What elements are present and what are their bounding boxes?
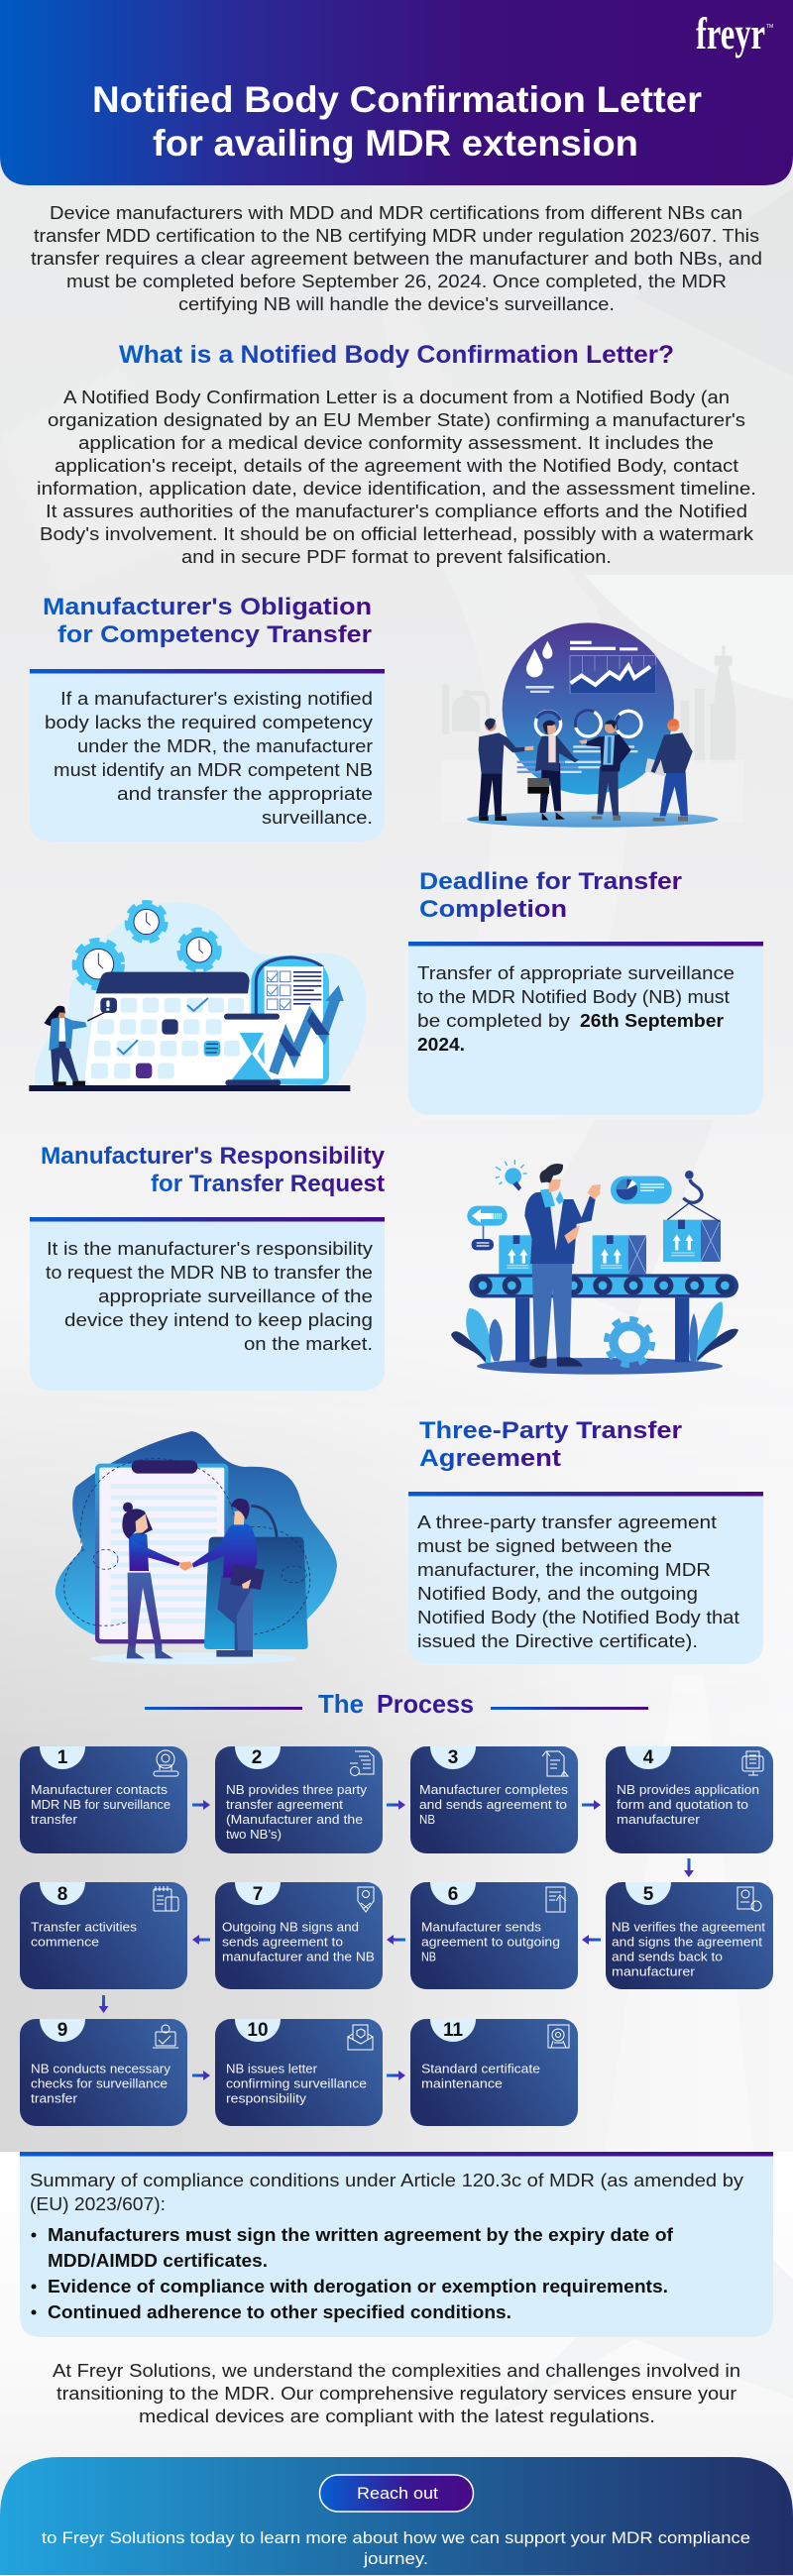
step 10	[215, 2019, 383, 2126]
heading: manufacturer's responsibility: for Transfer Request	[151, 1171, 385, 1197]
step 8: Transfer activities	[31, 1919, 138, 1935]
button: reach out: Reach out	[357, 2484, 438, 2503]
step 5	[606, 1882, 773, 1989]
step 8: commence	[31, 1935, 99, 1949]
footer text: journey.	[363, 2549, 428, 2568]
step 11: maintenance	[421, 2075, 503, 2091]
step 8: 8	[57, 1884, 67, 1905]
arrow: down	[684, 1858, 694, 1877]
step 4: 4	[643, 1747, 654, 1768]
arrow: left	[192, 1935, 210, 1945]
step 7: 7	[253, 1884, 263, 1905]
step 2: (Manufacturer and the	[226, 1812, 363, 1827]
definition paragraph: A Notified Body Confirmation Letter is a document from a Notified Body (an	[63, 388, 730, 407]
icon: gear	[607, 1319, 652, 1365]
panel: deadline: 2024.	[417, 1035, 465, 1055]
person: man with tablet	[645, 719, 693, 822]
step 2: two NB’s)	[226, 1827, 282, 1842]
definition paragraph: application for a medical device conformity assessment. It includes the	[78, 433, 714, 453]
heading: what is a notified body confirmation letter: What is a Notified Body Confirmation Letter?	[119, 341, 674, 369]
icon: bag	[204, 1506, 308, 1649]
heading: manufacturer's responsibility	[41, 1143, 385, 1197]
logo: freyr: freyr	[696, 8, 765, 58]
panel: three-party agreement	[408, 1492, 763, 1664]
heading: the process: The	[318, 1689, 364, 1719]
heading: deadline for transfer completion: Completion	[419, 896, 567, 923]
panel: competency transfer: must identify an MDR competent NB	[54, 760, 373, 780]
conveyor belt	[469, 1274, 738, 1297]
step 3: Manufacturer completes	[419, 1782, 569, 1797]
heading: deadline for transfer completion: Deadline for Transfer	[419, 868, 682, 895]
panel: responsibility: to request the MDR NB to transfer the	[46, 1263, 373, 1283]
step 7: sends agreement to	[222, 1935, 343, 1949]
heading: manufacturer's obligation: Manufacturer's Obligation	[43, 594, 372, 620]
arrow: left	[582, 1935, 601, 1945]
step 2: transfer agreement	[226, 1797, 343, 1812]
closing paragraph: transitioning to the MDR. Our comprehensive regulatory services ensure your	[57, 2384, 736, 2404]
icon: light bulb	[496, 1160, 527, 1191]
heading: three-party transfer agreement: Three-Party Transfer	[419, 1417, 683, 1444]
plants	[451, 1301, 738, 1363]
step 10: 10	[247, 2020, 269, 2041]
icon: device with checklist	[251, 955, 329, 1085]
heading: the process: Process	[377, 1689, 474, 1719]
panel: deadline: Transfer of appropriate surveillance	[417, 963, 735, 983]
step 11: 11	[443, 2020, 463, 2041]
step 4	[606, 1746, 773, 1853]
arrow	[192, 2071, 210, 2080]
bullet list: Evidence of compliance with derogation or exemption requirements.	[48, 2277, 668, 2296]
definition paragraph: and in secure PDF format to prevent falsification.	[181, 547, 612, 567]
step 10: responsibility	[226, 2091, 307, 2105]
step 9: 9	[57, 2020, 67, 2041]
panel: deadline	[408, 942, 763, 1115]
arrow: left	[387, 1935, 405, 1945]
icon: hourglass	[224, 1014, 281, 1085]
bullet list: MDD/AIMDD certificates.	[48, 2251, 268, 2271]
arrow	[582, 1800, 601, 1810]
definition paragraph: application's receipt, details of the agreement with the Notified Body, contact	[55, 456, 738, 476]
title	[92, 79, 702, 164]
step 6: Manufacturer sends	[421, 1919, 542, 1935]
step 6: agreement to outgoing	[421, 1935, 560, 1949]
definition paragraph	[37, 388, 756, 567]
definition paragraph: information, application date, device identification, and the assessment timeline.	[37, 479, 756, 499]
heading: manufacturer's obligation	[43, 594, 373, 648]
step 1: 1	[57, 1747, 68, 1768]
panel: compliance summary: (EU) 2023/607):	[30, 2194, 166, 2214]
panel: responsibility: appropriate surveillance of the	[98, 1287, 373, 1306]
step 9: transfer	[31, 2091, 78, 2105]
intro paragraph: Device manufacturers with MDD and MDR certifications from different NBs can	[50, 203, 742, 223]
intro paragraph: transfer requires a clear agreement between the manufacturer and both NBs, and	[31, 249, 762, 269]
illustration: handshake and clipboard	[56, 1431, 337, 1664]
step 1: transfer	[31, 1812, 78, 1827]
person: woman with briefcase	[527, 721, 579, 820]
panel: three-party agreement: must be signed between the	[417, 1536, 672, 1556]
step 5: NB verifies the agreement	[612, 1919, 765, 1935]
panel: responsibility: device they intend to keep placing	[64, 1310, 373, 1330]
footer banner	[0, 2457, 793, 2575]
panel: three-party agreement: Notified Body (the Notified Body that	[417, 1608, 739, 1627]
panel: competency transfer: under the MDR, the manufacturer	[77, 736, 373, 756]
step 6: NB	[421, 1949, 436, 1964]
panel: responsibility: on the market.	[244, 1334, 373, 1354]
icon: direction sign	[467, 1206, 508, 1250]
step 11: Standard certificate	[421, 2062, 540, 2075]
step 3: NB	[419, 1812, 435, 1827]
panel: three-party agreement: manufacturer, the incoming MDR	[417, 1560, 711, 1580]
person: man	[180, 1499, 265, 1657]
arrow	[387, 2071, 405, 2080]
closing paragraph: medical devices are compliant with the latest regulations.	[139, 2407, 655, 2426]
step 3: and sends agreement to	[419, 1797, 567, 1812]
intro paragraph: must be completed before September 26, 2024. Once completed, the MDR	[66, 272, 727, 291]
step 11	[410, 2019, 578, 2126]
icon: clipboard	[95, 1460, 228, 1643]
panel: three-party agreement: Notified Body, and the outgoing	[417, 1584, 698, 1604]
step 3	[410, 1746, 578, 1853]
intro paragraph	[31, 203, 762, 314]
panel: competency transfer: and transfer the appropriate	[117, 784, 373, 804]
icon: crane hook	[667, 1171, 721, 1222]
illustration: business team with chart	[441, 622, 743, 828]
panel: compliance summary: Summary of compliance conditions under Article 120.3c of MDR (as amended by	[30, 2171, 743, 2190]
heading: three-party transfer agreement: Agreement	[419, 1445, 561, 1472]
panel: deadline: be completed by	[417, 1011, 570, 1031]
bullet list: Continued adherence to other specified conditions.	[48, 2302, 511, 2322]
panel: deadline: 26th September	[580, 1011, 724, 1031]
step 2	[215, 1746, 383, 1853]
step 9	[20, 2019, 187, 2126]
heading: manufacturer's obligation: for Competency Transfer	[57, 621, 373, 648]
step 5: 5	[643, 1884, 654, 1905]
arrow	[192, 1800, 210, 1810]
panel: competency transfer: surveillance.	[262, 808, 373, 828]
panel: responsibility	[30, 1217, 385, 1391]
illustration: conveyor belt and man	[451, 1160, 738, 1375]
bullet list	[32, 2225, 674, 2322]
heading: manufacturer's responsibility: Manufacturer's Responsibility	[41, 1143, 385, 1170]
bullet list: Manufacturers must sign the written agreement by the expiry date of	[48, 2225, 674, 2245]
step 9: checks for surveillance	[31, 2075, 168, 2091]
definition paragraph: It assures authorities of the manufacturer's compliance efforts and the Notified	[46, 502, 747, 521]
step 5: manufacturer	[612, 1964, 696, 1978]
step 10: confirming surveillance	[226, 2075, 367, 2091]
arrow	[387, 1800, 405, 1810]
closing paragraph	[53, 2361, 740, 2426]
step 8	[20, 1882, 187, 1989]
step 3: 3	[448, 1747, 458, 1768]
heading: the process	[145, 1689, 648, 1719]
step 2: NB provides three party	[226, 1782, 368, 1797]
panel: competency transfer	[30, 669, 385, 841]
step 4: form and quotation to	[617, 1797, 748, 1812]
person: man	[524, 1164, 601, 1368]
definition paragraph: organization designated by an EU Member State) confirming a manufacturer's	[48, 410, 745, 430]
footer text: to Freyr Solutions today to learn more about how we can support your MDR compliance	[42, 2528, 750, 2547]
step 1: MDR NB for surveillance	[31, 1797, 170, 1812]
panel: compliance summary	[20, 2152, 773, 2337]
legs of conveyor	[515, 1297, 689, 1362]
icon: clock gears	[74, 903, 219, 988]
step 4: manufacturer	[617, 1812, 701, 1827]
step 2: 2	[252, 1747, 262, 1768]
intro paragraph: certifying NB will handle the device's surveillance.	[178, 294, 615, 314]
person: woman	[122, 1503, 180, 1658]
heading: three-party transfer agreement	[419, 1417, 683, 1472]
process flow	[20, 1746, 773, 2126]
person: left man	[479, 719, 533, 821]
intro paragraph: transfer MDD certification to the NB certifying MDR under regulation 2023/607. This	[34, 226, 759, 246]
illustration: calendar, clocks, hourglass	[29, 902, 367, 1091]
step 9: NB conducts necessary	[31, 2062, 171, 2075]
step 6	[410, 1882, 578, 1989]
panel: competency transfer: body lacks the required competency	[45, 713, 373, 732]
panel: deadline: to the MDR Notified Body (NB) must	[417, 987, 730, 1007]
step 4: NB provides application	[617, 1782, 759, 1797]
person: woman pointing	[44, 1006, 104, 1085]
heading: deadline for transfer completion	[419, 868, 682, 923]
step 7: manufacturer and the NB	[222, 1949, 375, 1964]
panel: responsibility: It is the manufacturer's responsibility	[47, 1239, 373, 1259]
boxes	[499, 1220, 721, 1274]
title: Notified Body Confirmation Letter	[92, 79, 702, 120]
step 7	[215, 1882, 383, 1989]
step 1	[20, 1746, 187, 1853]
icon: pie chart bubble	[611, 1176, 672, 1204]
logo: freyr: TM	[766, 24, 773, 30]
step 10: NB issues letter	[226, 2062, 318, 2075]
panel: three-party agreement: issued the Directive certificate).	[417, 1631, 698, 1651]
step 6: 6	[448, 1884, 458, 1905]
button: reach out	[319, 2475, 474, 2512]
closing paragraph: At Freyr Solutions, we understand the complexities and challenges involved in	[53, 2361, 740, 2381]
footer text	[42, 2528, 750, 2568]
definition paragraph: Body's involvement. It should be on official letterhead, possibly with a watermark	[40, 524, 754, 544]
panel: three-party agreement: A three-party transfer agreement	[417, 1512, 717, 1532]
header banner	[0, 0, 793, 185]
person: man in blue tie	[579, 720, 631, 821]
icon: rising arrow	[274, 985, 344, 1073]
step 5: and signs the agreement	[612, 1935, 762, 1949]
step 5: and sends back to	[612, 1949, 723, 1964]
step 1: Manufacturer contacts	[31, 1782, 169, 1797]
title: for availing MDR extension	[153, 123, 638, 164]
step 7: Outgoing NB signs and	[222, 1919, 359, 1935]
calendar	[85, 972, 253, 1085]
arrow: down	[99, 1995, 109, 2013]
panel: competency transfer: If a manufacturer's existing notified	[60, 689, 373, 709]
